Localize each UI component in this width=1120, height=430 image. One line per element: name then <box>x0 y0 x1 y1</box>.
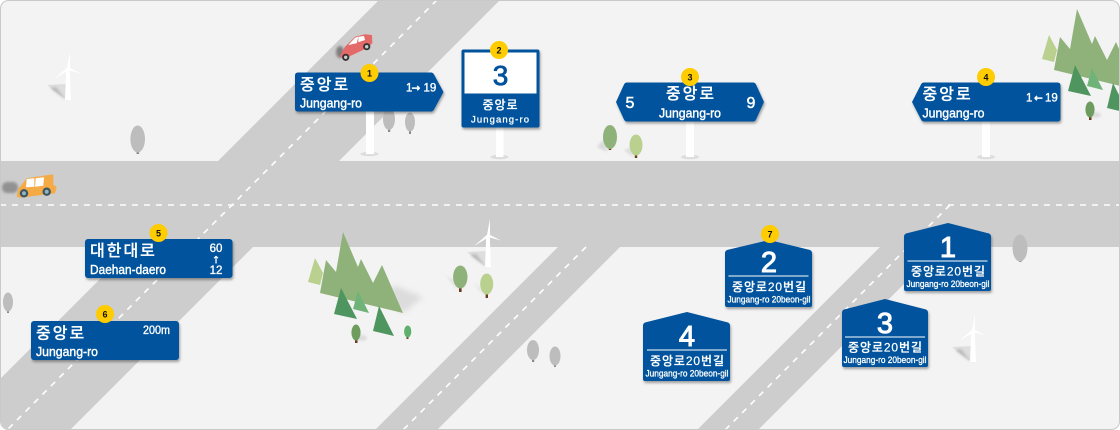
horizontal road <box>0 161 1120 247</box>
badge 3 <box>681 68 699 86</box>
badge 1 <box>360 64 378 82</box>
sign 5 numbers <box>210 243 222 277</box>
sign 6: advance road name <box>31 305 179 360</box>
forest left <box>308 232 423 343</box>
number 3: 3 <box>877 308 893 340</box>
forest right <box>1042 9 1120 120</box>
sign plate 4 <box>912 82 1060 122</box>
sign 7 plate number 3 <box>842 299 928 367</box>
sign 6 distance: 200m <box>143 325 170 337</box>
sign plate 1 <box>295 72 444 112</box>
house plate 3 <box>842 299 928 367</box>
sign 5 name: 대한대로 <box>90 242 157 260</box>
badge 2: 2 <box>496 46 502 56</box>
sign 1: road name with forward distance <box>295 64 444 156</box>
icon: red car <box>336 34 372 61</box>
plate 4 name: 중앙로20번길 <box>650 354 724 368</box>
diagonal road 2 <box>375 247 620 430</box>
sign 3 right number: 9 <box>747 95 756 112</box>
sign 5: intersection road name <box>85 224 232 278</box>
badge 5 <box>150 224 168 242</box>
sign post 4 <box>977 120 995 159</box>
sign 3 romanized name: Jungang-ro <box>659 106 721 120</box>
diagonal road 3 <box>698 247 904 429</box>
divider 4 <box>647 350 727 351</box>
sign post 3 <box>681 120 699 159</box>
sign 1 romanized name: Jungang-ro <box>300 96 362 110</box>
plate 2 name: 중앙로20번길 <box>732 280 806 294</box>
sign 5 numbers: 12 <box>210 265 222 277</box>
house plate 2 <box>725 240 812 307</box>
number 2: 2 <box>761 247 777 279</box>
sign plate 2 <box>462 50 540 128</box>
sign 3: road name with both ends <box>616 68 764 159</box>
badge 6 <box>96 305 114 323</box>
sign 2: building number plate <box>462 41 540 159</box>
sign 4 range: ← <box>1034 92 1043 104</box>
sign 2 romanized name: Jungang-ro <box>471 114 529 126</box>
sign 1 range: 19 <box>424 82 436 94</box>
sign 2 white panel <box>464 52 536 94</box>
divider 1 <box>908 260 988 262</box>
plate 2 romanized name: Jungang-ro 20beon-gil <box>728 294 810 306</box>
diagonal road 1 <box>0 0 500 430</box>
sign 4 romanized name: Jungang-ro <box>922 106 984 120</box>
divider 2 <box>728 276 808 277</box>
wind turbine right <box>952 314 986 362</box>
sign 5 romanized name: Daehan-daero <box>90 262 166 277</box>
sign 2 number: 3 <box>493 60 508 91</box>
sign 5 numbers: 60 <box>210 243 222 255</box>
sign 4 range: 19 <box>1045 92 1058 104</box>
sign 4 name: 중앙로 <box>922 86 973 104</box>
green trees <box>446 125 642 298</box>
sign plate 5 <box>85 239 232 278</box>
badge 4: 4 <box>983 72 989 82</box>
wind turbine top left <box>47 52 81 100</box>
sign 7 plate number 2 <box>725 225 812 307</box>
sign 7 plate number 4 <box>643 312 730 381</box>
sign 1 name: 중앙로 <box>300 76 350 94</box>
badge 4 <box>977 68 995 86</box>
plate 3 name: 중앙로20번길 <box>848 340 922 354</box>
sign post 1 <box>360 110 378 156</box>
sign 5 numbers: ↑ <box>212 254 220 266</box>
sign 3 left number: 5 <box>626 95 635 112</box>
house plate 4 <box>643 312 730 381</box>
sign 6 romanized name: Jungang-ro <box>36 344 98 359</box>
sign 2 name: 중앙로 <box>482 98 519 112</box>
sign plate 6 <box>31 321 179 360</box>
plate 1 name: 중앙로20번길 <box>911 264 985 278</box>
sign 3 name: 중앙로 <box>666 85 716 103</box>
house plate 1 <box>904 223 991 291</box>
icon: orange car <box>2 174 57 198</box>
number 4: 4 <box>679 321 695 353</box>
divider 3 <box>845 336 925 338</box>
badge 3: 3 <box>687 72 693 82</box>
gray trees <box>3 108 1028 367</box>
sign 1 range: → <box>412 82 420 94</box>
sign post 2 <box>490 126 508 159</box>
wind turbine center <box>467 219 501 267</box>
number 1: 1 <box>940 232 956 264</box>
badge 1: 1 <box>367 68 372 78</box>
plate 4 romanized name: Jungang-ro 20beon-gil <box>646 368 728 380</box>
badge 5: 5 <box>156 228 161 238</box>
badge 7: 7 <box>767 230 773 240</box>
sign 6 name: 중앙로 <box>36 324 86 342</box>
plate 1 romanized name: Jungang-ro 20beon-gil <box>906 279 990 290</box>
sign 1 range: 1 <box>406 82 412 94</box>
sign 4 range: 1 <box>1026 92 1032 104</box>
plate 3 romanized name: Jungang-ro 20beon-gil <box>844 355 926 366</box>
sign plate 3 <box>616 82 764 122</box>
sign 4: road name with backward distance <box>912 68 1060 159</box>
sign 7 plate number 1 <box>904 223 991 291</box>
badge 6: 6 <box>102 310 108 320</box>
